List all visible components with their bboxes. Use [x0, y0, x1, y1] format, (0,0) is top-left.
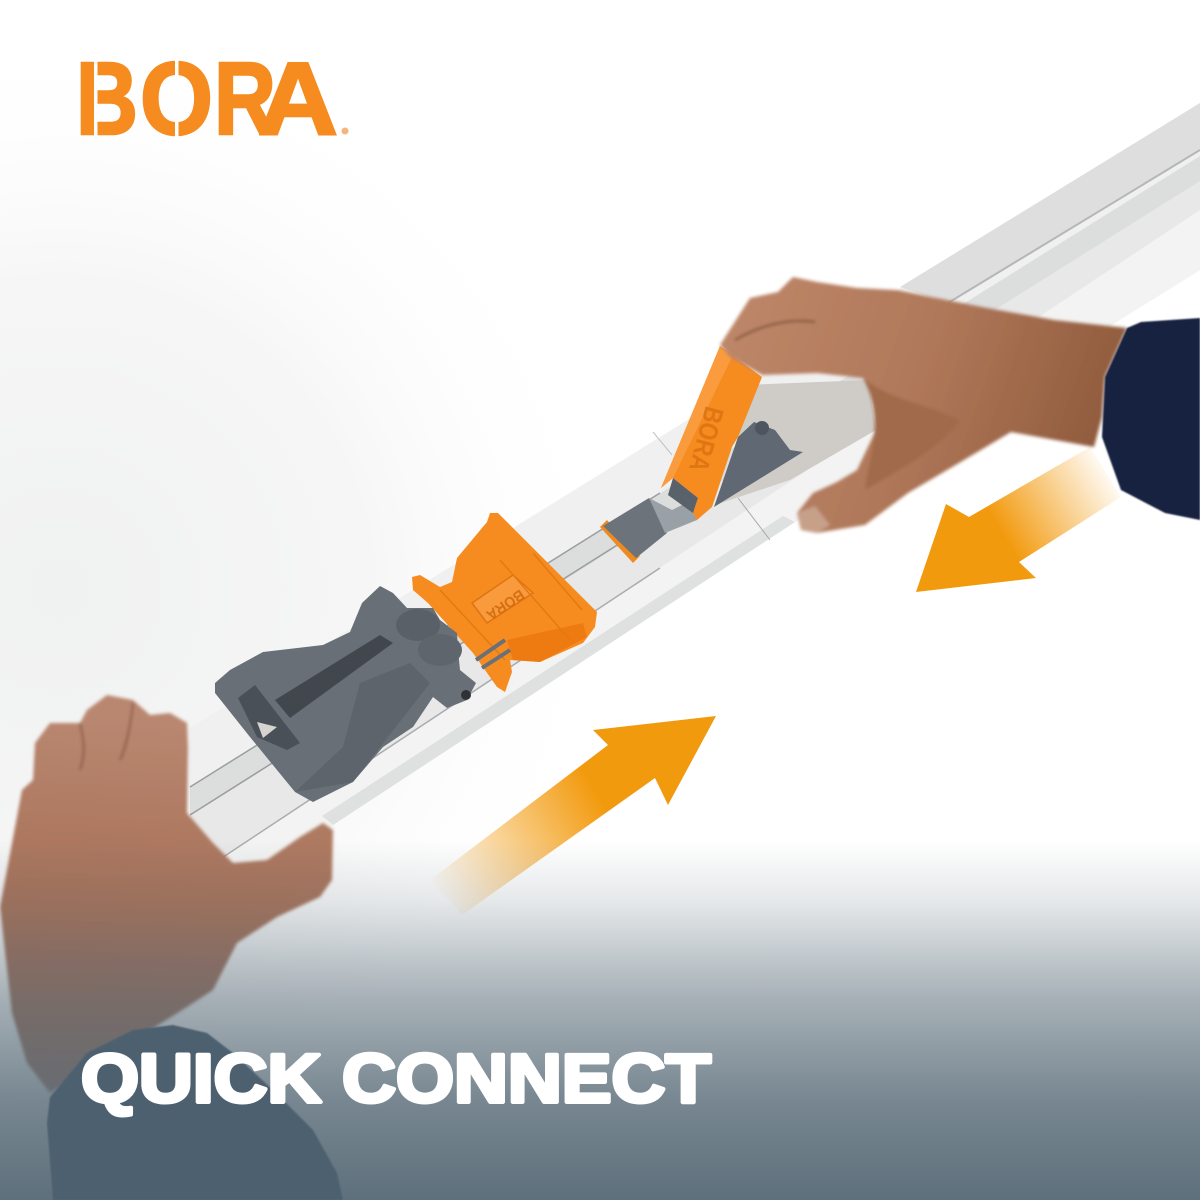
bottom fade overlay — [0, 840, 1200, 1200]
hand upper right — [720, 277, 1127, 533]
navy sleeve upper right — [1102, 318, 1200, 520]
hand lower left — [0, 695, 333, 1093]
logo: BORA — [76, 41, 348, 156]
navy sleeve lower left — [47, 1025, 343, 1200]
logo: BORA: B — [76, 41, 138, 156]
grey clamp head — [215, 586, 510, 802]
logo: BORA: O — [140, 41, 213, 156]
rail: front strip — [190, 210, 1200, 915]
clamp: end window — [238, 685, 300, 750]
hand: palm shadow — [863, 378, 960, 490]
logo: BORA: R — [214, 41, 276, 156]
rail: upper right shaded band — [900, 103, 1200, 303]
connector: BORA plate — [472, 575, 533, 623]
rail: middle rib — [190, 181, 1200, 879]
rail: groove band — [190, 156, 1200, 879]
connector: open mouth — [507, 623, 587, 662]
arrow: upper pointing down-left — [916, 447, 1121, 592]
channel opening near lever — [715, 380, 876, 505]
logo: BORA: A — [258, 41, 338, 156]
clamp: discs — [396, 609, 440, 641]
hand: thumb nail — [797, 506, 830, 533]
aluminium rail — [190, 103, 1200, 915]
clamp: screw — [461, 690, 471, 700]
orange connector — [412, 513, 597, 692]
hand: finger gap — [735, 321, 815, 340]
rail: back rim — [190, 103, 1200, 787]
title: QUICK CONNECT: QUICK CONNECT — [81, 1040, 711, 1117]
grey mounting plate — [714, 421, 803, 507]
rail: front bevel — [322, 516, 795, 825]
grey sliding block — [600, 498, 697, 563]
orange lever — [661, 346, 762, 520]
clamp: long slot — [275, 635, 393, 718]
orange lever: BORA — [683, 403, 729, 475]
clamp: lower shelf — [295, 663, 430, 792]
orange connector: BORA — [483, 586, 527, 623]
arrow: lower pointing up-right — [430, 716, 716, 915]
